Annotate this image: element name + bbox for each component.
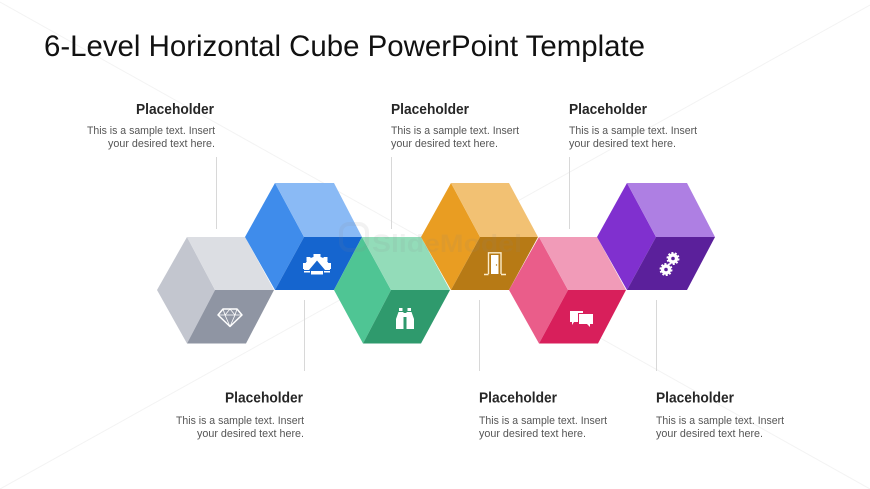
text block: top left: Placeholder [136,102,214,118]
text block: top right [569,102,697,150]
text block: bottom middle: your desired text here. [479,428,586,440]
text block: bottom right [656,390,784,440]
cube 2: blue with arc gear [245,183,362,290]
watermark [341,224,522,258]
cube 6: purple with gears [597,183,715,290]
cube 4: orange with door [421,183,538,290]
text block: bottom left: your desired text here. [197,428,304,440]
icon: chat bubbles [570,311,593,327]
text block: top right: This is a sample text. Insert [569,125,697,137]
text block: bottom middle: Placeholder [479,390,557,406]
text block: top middle: Placeholder [391,102,469,118]
cube 1: grey with diamond [157,237,274,344]
text block: bottom right: Placeholder [656,390,734,406]
icon: binoculars [396,308,414,329]
text block: top left: This is a sample text. Insert [87,125,215,137]
text block: top left: your desired text here. [108,138,215,150]
watermark: SlideModel [372,230,522,258]
text block: bottom left: Placeholder [225,390,303,406]
text block: top middle: This is a sample text. Insert [391,125,519,137]
text block: bottom left: This is a sample text. Insert [176,415,304,427]
cube 3: green with binoculars [334,237,450,344]
icon: door [484,253,506,274]
icon: diamond [218,309,242,326]
text block: bottom middle: This is a sample text. Insert [479,415,607,427]
text block: top middle [391,102,519,150]
title: 6-Level Horizontal Cube PowerPoint Template [44,30,645,63]
icon: gears [660,253,679,275]
text block: top middle: your desired text here. [391,138,498,150]
text block: bottom right: your desired text here. [656,428,763,440]
icon: arc gear [303,254,331,274]
text block: top right: your desired text here. [569,138,676,150]
text block: bottom right: This is a sample text. Insert [656,415,784,427]
text block: top right: Placeholder [569,102,647,118]
text block: top left [87,102,215,150]
text block: bottom middle [479,390,607,440]
cube 5: pink with chat bubbles [509,237,626,344]
text block: bottom left [176,390,304,440]
